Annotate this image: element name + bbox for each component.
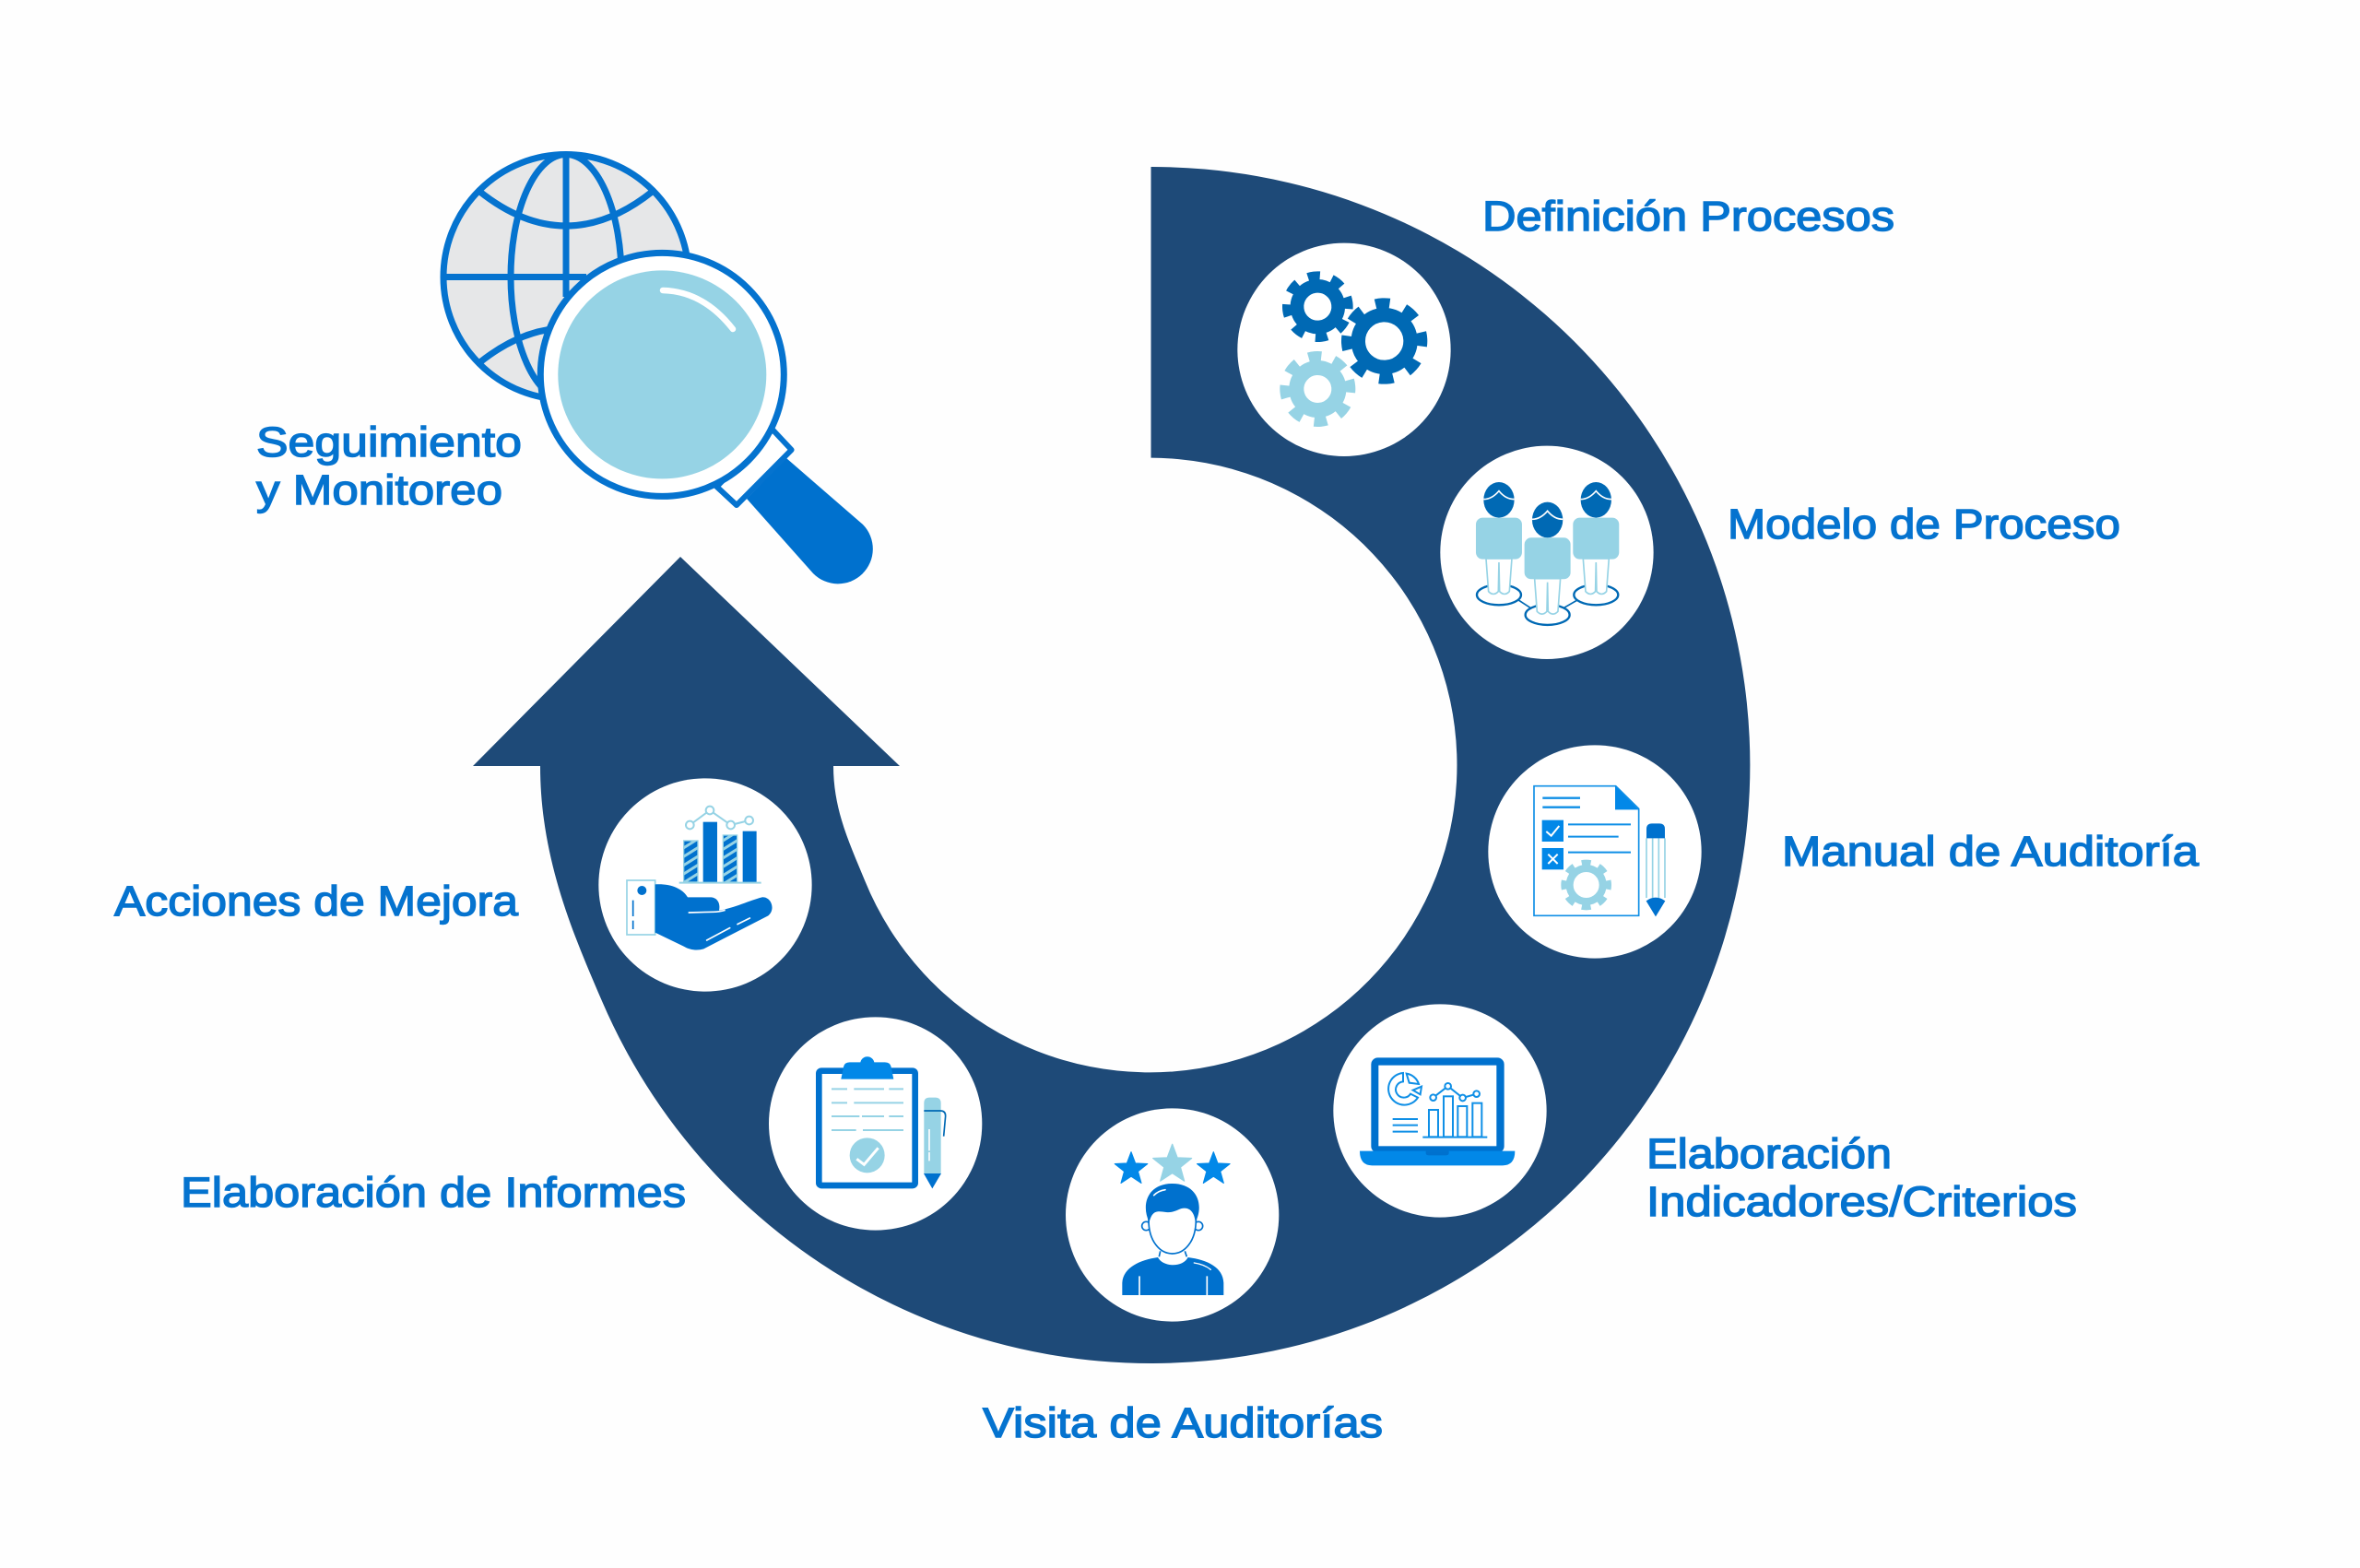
label: Seguimiento y Monitoreo xyxy=(256,419,522,513)
label: Manual de Auditoría: Manual de Auditoría xyxy=(1782,828,2200,875)
magnifier collar xyxy=(717,430,792,505)
label: Elaboración de Informes: Elaboración de Informes xyxy=(181,1169,686,1216)
icon: team of people xyxy=(1440,446,1654,659)
label: Seguimiento y Monitoreo: Seguimiento xyxy=(256,419,522,466)
globe xyxy=(443,152,689,400)
label: Acciones de Mejora: Acciones de Mejora xyxy=(114,878,519,925)
label: Definición Procesos: Definición Procesos xyxy=(1482,193,1894,240)
icon: hand with chart xyxy=(598,778,812,992)
icon: gears xyxy=(1237,243,1451,456)
magnifier handle xyxy=(747,458,873,584)
label: Modelo de Proceso: Modelo de Proceso xyxy=(1728,501,2120,548)
magnifier lens xyxy=(540,253,784,496)
circular arrow ring xyxy=(473,167,1750,1363)
icon: auditor with stars xyxy=(1066,1108,1279,1322)
icon: audit manual document xyxy=(1488,745,1702,959)
label: Elaboración Indicadores/Criterios: Elaboración xyxy=(1646,1130,1892,1177)
icon: clipboard report xyxy=(769,1017,982,1231)
icon: laptop dashboard xyxy=(1333,1004,1547,1218)
label: Seguimiento y Monitoreo: y Monitoreo xyxy=(256,466,502,513)
label: Elaboración Indicadores/Criterios xyxy=(1646,1130,2077,1225)
icon: globe with magnifying glass xyxy=(443,152,873,584)
infographic: audit cycle xyxy=(113,151,2200,1438)
label: Elaboración Indicadores/Criterios: Indicadores/Criterios xyxy=(1646,1178,2077,1225)
label: Visita de Auditorías: Visita de Auditorías xyxy=(983,1399,1383,1446)
